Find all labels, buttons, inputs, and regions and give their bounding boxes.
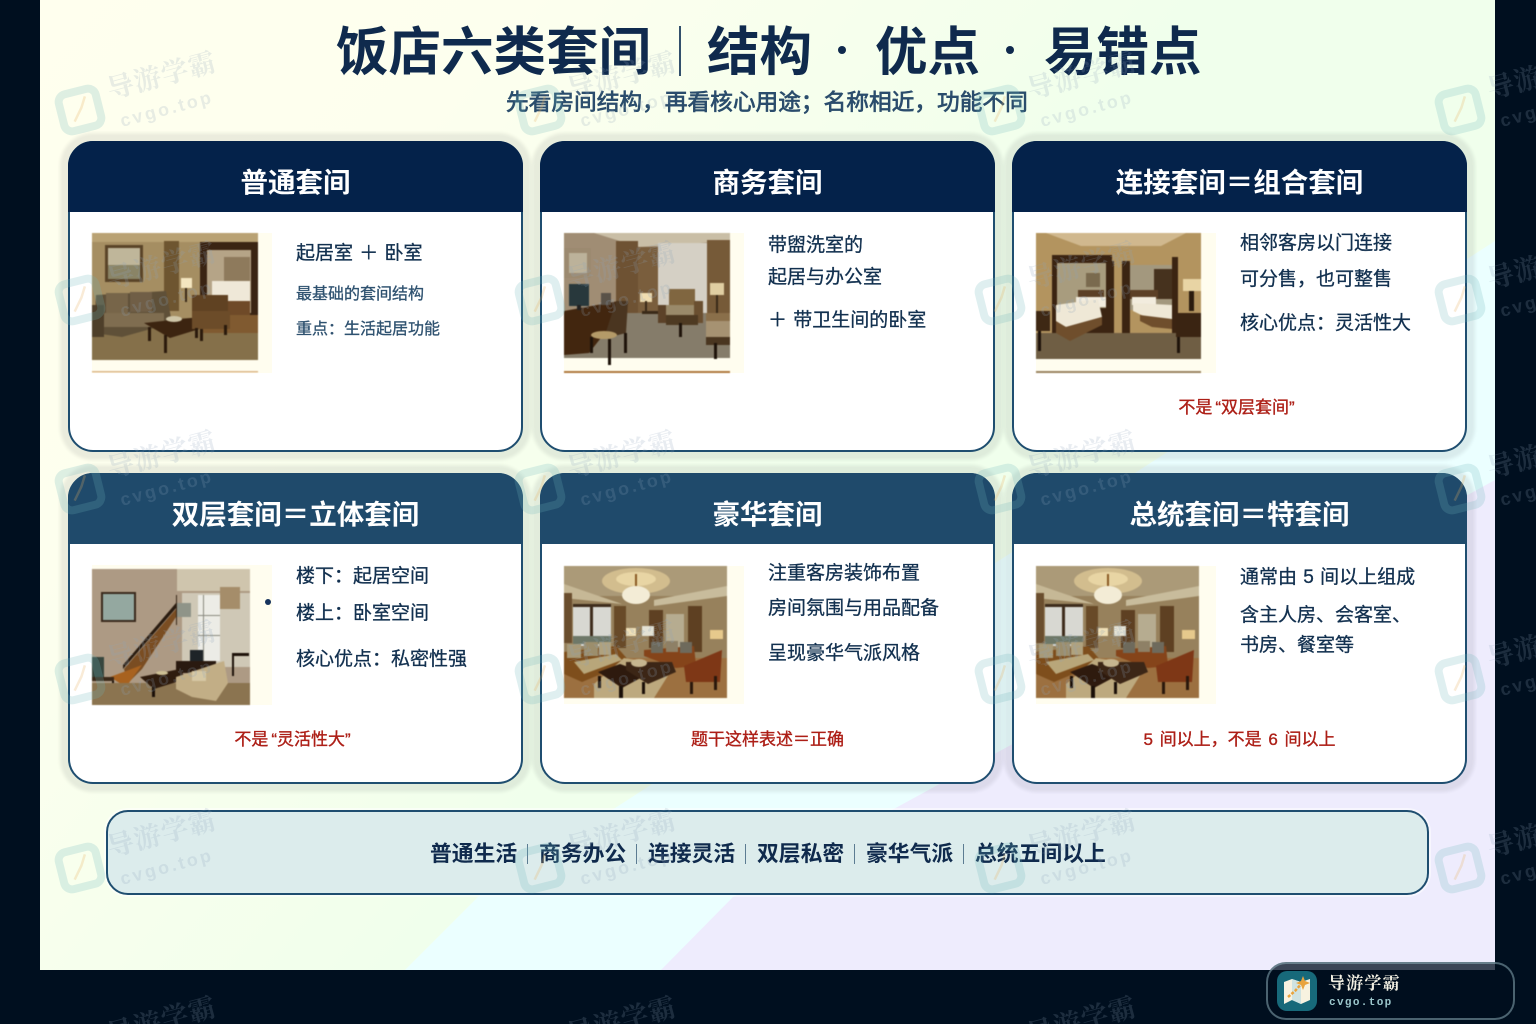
watermarks: cvgo.top: [1038, 277, 1136, 321]
text: structure line 2: 起居与办公室: [768, 267, 882, 288]
brand badge: [1266, 962, 1515, 1020]
watermarks: cvgo.top: [578, 845, 676, 889]
watermarks: cvgo.top: [578, 466, 676, 510]
watermarks: 导游学霸: [562, 419, 680, 486]
text: room count: 通常由 5 间以上组成: [1240, 567, 1415, 588]
heading: 总统套间＝特套间: [1012, 473, 1467, 544]
heading: 连接套间＝组合套间: [1012, 141, 1467, 212]
photo: luxury suite: [564, 566, 744, 704]
text: connection: 相邻客房以门连接: [1240, 233, 1392, 254]
title: 优点: [875, 23, 980, 82]
watermarks: 导游学霸: [562, 40, 680, 107]
heading: 豪华套间: 豪华套间: [712, 499, 822, 530]
text: upstairs: 楼上：卧室空间: [296, 603, 429, 624]
text: core advantage: 核心优点：灵活性大: [1240, 313, 1411, 334]
watermarks: cvgo.top: [118, 845, 216, 889]
watermarks: cvgo.top: [118, 466, 216, 510]
callout: correct statement: 题干这样表述＝正确: [691, 730, 844, 749]
panel: 豪华套间: [540, 473, 995, 784]
watermarks: cvgo.top: [118, 277, 216, 321]
watermarks: 导游学霸: [1022, 609, 1140, 676]
photo: living room with bedroom: [92, 233, 272, 373]
watermarks: cvgo.top: [1038, 845, 1136, 889]
text: rooms line 2: 书房、餐室等: [1240, 635, 1354, 656]
heading: 双层套间＝立体套间: 双层套间＝立体套间: [172, 499, 419, 530]
title: 饭店六类套间: [336, 23, 651, 82]
watermarks: 导游学霸: [1022, 419, 1140, 486]
text: basic note: 最基础的套间结构: [296, 286, 424, 303]
summary bar: 双层私密: [757, 841, 844, 866]
text: style: 呈现豪华气派风格: [768, 643, 920, 664]
summary bar: 连接灵活: [648, 841, 735, 866]
icon: map logo: [1277, 971, 1317, 1011]
text: structure line 1: 带盥洗室的: [768, 235, 863, 256]
watermarks: 导游学霸: [562, 609, 680, 676]
heading: 豪华套间: [540, 473, 995, 544]
panel: 连接套间: [1012, 141, 1467, 452]
watermarks: cvgo.top: [578, 656, 676, 700]
watermarks: cvgo.top: [118, 87, 216, 131]
text: core advantage: 核心优点：私密性强: [296, 649, 467, 670]
photo: connecting rooms: [1036, 233, 1216, 373]
heading: 普通套间: 普通套间: [240, 167, 350, 198]
summary bar: 普通生活: [430, 841, 517, 866]
watermarks: cvgo.top: [1038, 656, 1136, 700]
text: sale mode: 可分售，也可整售: [1240, 269, 1392, 290]
watermarks: 导游学霸: [102, 798, 220, 865]
watermarks: cvgo.top: [1038, 87, 1136, 131]
watermarks: cvgo.top: [578, 87, 676, 131]
heading: 商务套间: [540, 141, 995, 212]
text: rooms line 1: 含主人房、会客室、: [1240, 605, 1411, 626]
watermarks: 导游学霸: [102, 419, 220, 486]
summary bar: [106, 810, 1429, 895]
watermarks: cvgo.top: [578, 277, 676, 321]
panel: 总统套间: [1012, 473, 1467, 784]
brand url: cvgo.top: [1329, 997, 1393, 1009]
text: downstairs: 楼下：起居空间: [296, 566, 429, 587]
brand name: 导游学霸: [1328, 969, 1401, 994]
watermarks: 导游学霸: [1022, 230, 1140, 297]
watermarks: 导游学霸: [1022, 40, 1140, 107]
heading: 连接套间＝组合套间: 连接套间＝组合套间: [1116, 167, 1363, 198]
callout: common mistake: 不是“灵活性大”: [234, 730, 351, 749]
panel: 普通套间: [68, 141, 523, 452]
photo: presidential suite: [1036, 566, 1216, 704]
text: decoration: 注重客房装饰布置: [768, 563, 920, 584]
callout: common mistake: 不是“双层套间”: [1178, 398, 1295, 417]
watermarks: 导游学霸: [562, 230, 680, 297]
dot: [265, 599, 271, 605]
text: ambience: 房间氛围与用品配备: [768, 598, 939, 619]
watermarks: cvgo.top: [118, 656, 216, 700]
heading: 普通套间: [68, 141, 523, 212]
watermarks: 导游学霸: [102, 40, 220, 107]
title: [336, 23, 1202, 82]
callout: common mistake: 5 间以上，不是 6 间以上: [1143, 730, 1336, 749]
summary bar: 豪华气派: [866, 841, 953, 866]
watermarks: 导游学霸: [102, 609, 220, 676]
summary bar: 总统五间以上: [975, 841, 1106, 866]
heading: 总统套间＝特套间: 总统套间＝特套间: [1130, 499, 1350, 530]
heading: 商务套间: 商务套间: [712, 167, 822, 198]
photo: business suite: [564, 233, 744, 373]
panel: 双层套间: [68, 473, 523, 784]
panel: 商务套间: [540, 141, 995, 452]
watermarks: cvgo.top: [1038, 466, 1136, 510]
heading: 双层套间＝立体套间: [68, 473, 523, 544]
photo: duplex suite: [92, 565, 272, 705]
watermarks: 导游学霸: [102, 230, 220, 297]
watermarks: 导游学霸: [1022, 798, 1140, 865]
watermarks: 导游学霸: [562, 798, 680, 865]
title: 易错点: [1044, 23, 1202, 82]
text: structure: 起居室 ＋ 卧室: [296, 243, 423, 264]
title: 结构: [707, 23, 812, 82]
subtitle: 先看房间结构，再看核心用途；名称相近，功能不同: [506, 89, 1028, 115]
text: key point: 重点：生活起居功能: [296, 321, 440, 338]
text: structure line 3: ＋ 带卫生间的卧室: [768, 310, 926, 331]
summary bar: 商务办公: [539, 841, 626, 866]
